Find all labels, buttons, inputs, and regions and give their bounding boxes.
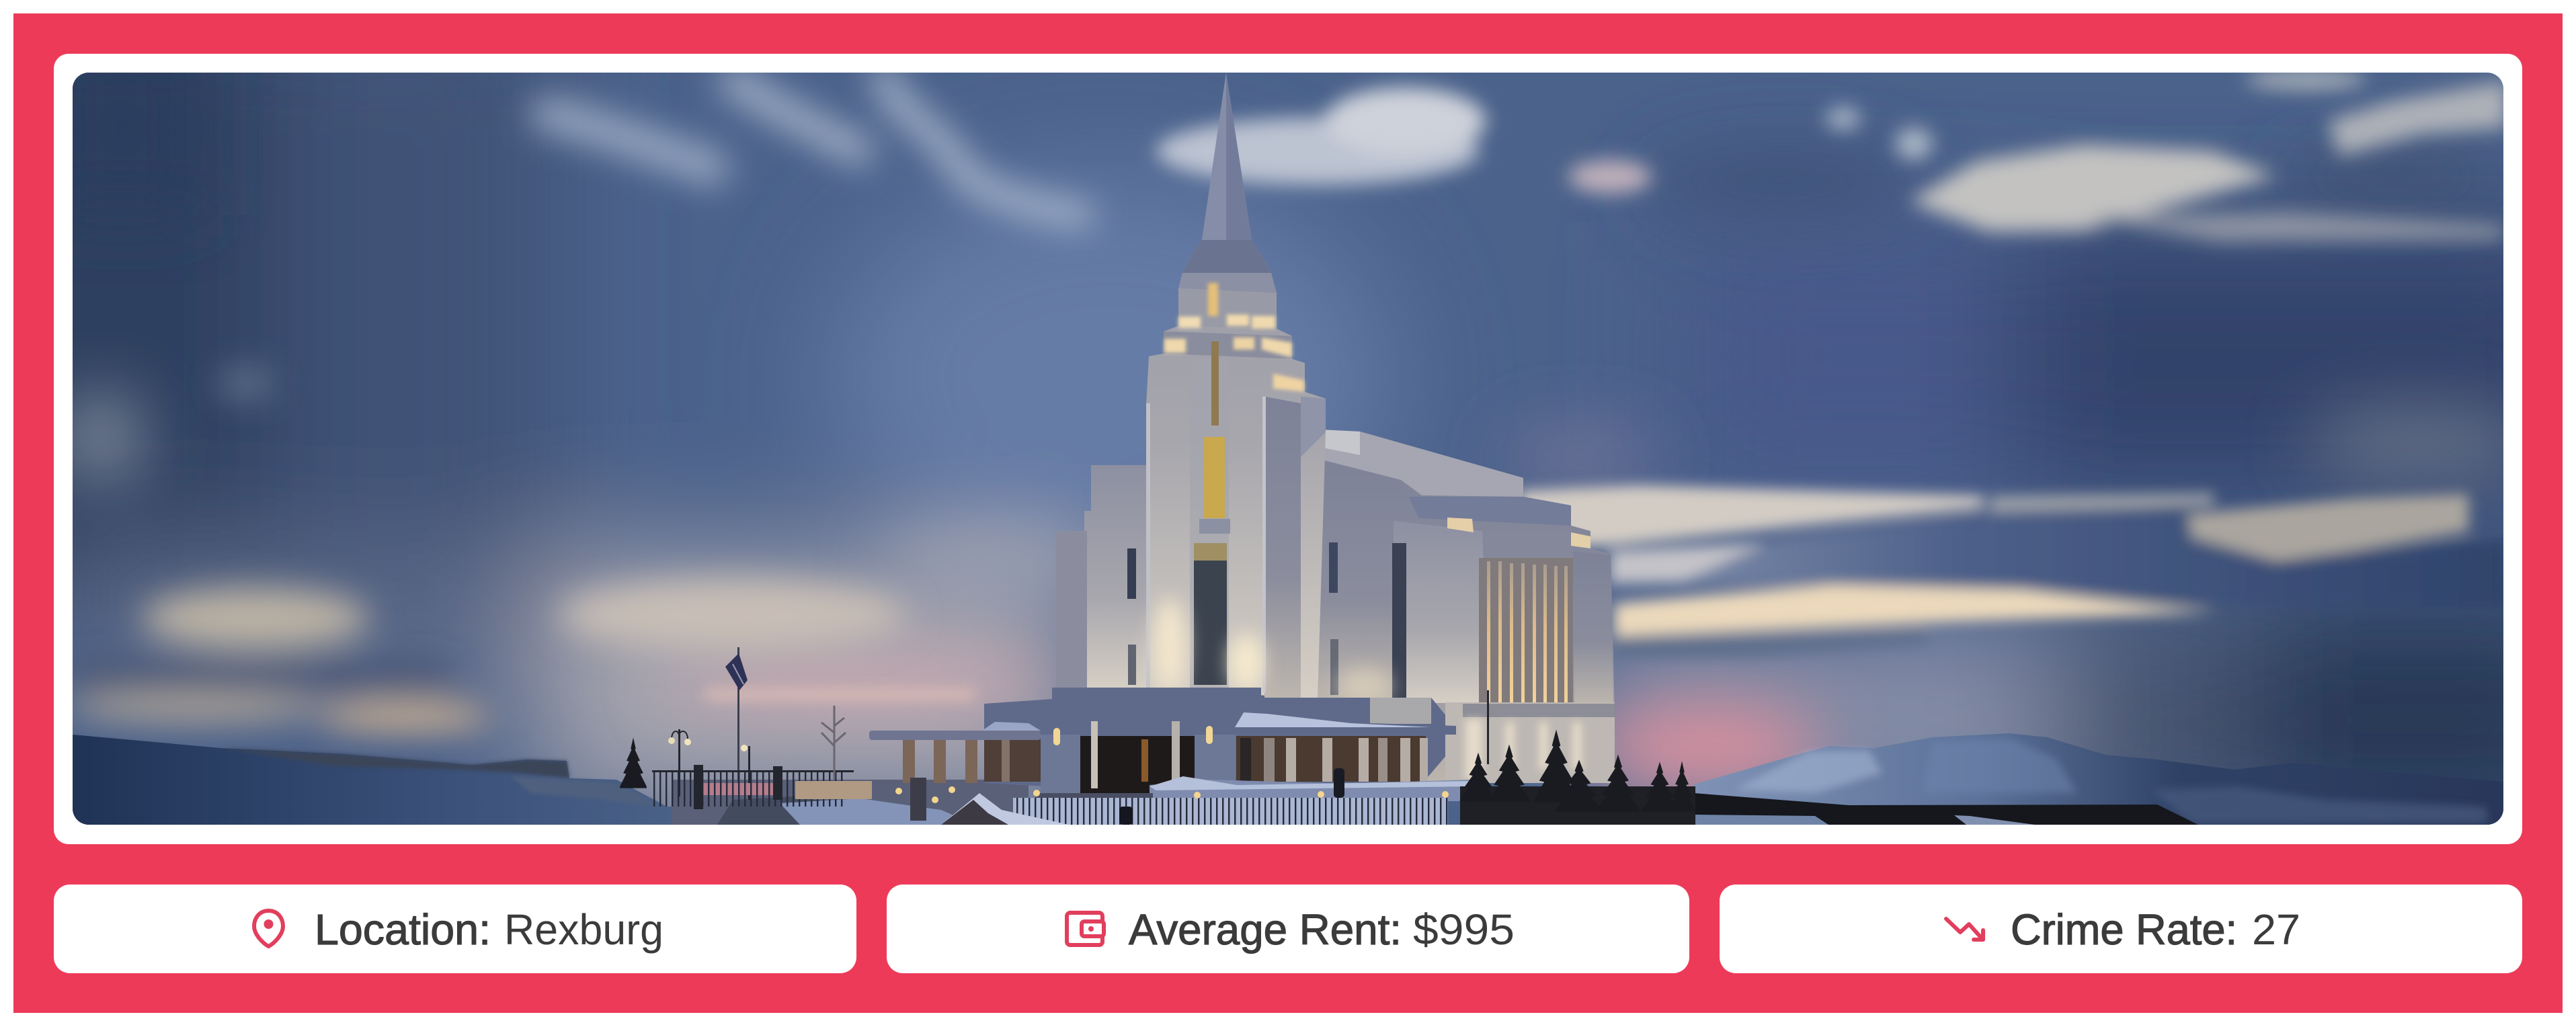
main entrance [1041, 735, 1080, 793]
evergreen trees right [1460, 690, 1695, 825]
flag and pole [725, 647, 748, 795]
icon: wallet [1067, 913, 1104, 945]
label: location: Location: [315, 905, 491, 954]
fins [1487, 561, 1490, 703]
tower lit setbacks [1164, 283, 1304, 392]
photo card [54, 54, 2522, 844]
label: average rent: Average Rent: [1129, 905, 1402, 954]
right porch [1236, 736, 1426, 782]
stat pill: average rent [887, 885, 1689, 973]
right nave [1277, 429, 1615, 783]
west block [1056, 465, 1146, 688]
photo: temple at dusk [73, 73, 2503, 825]
label: crime rate: Crime Rate: [2011, 905, 2237, 954]
temple [869, 73, 1615, 793]
windows [1204, 437, 1225, 518]
icon: map pin [254, 911, 283, 946]
value: average rent: $995 [1413, 905, 1515, 954]
ground and snow [672, 780, 1029, 825]
mountain [1694, 733, 2503, 825]
lamps, fence and small trees left [620, 706, 872, 809]
tower [1146, 73, 1326, 699]
base block [984, 688, 1463, 788]
snow hill left [73, 735, 672, 825]
left canopy [984, 739, 1041, 782]
clouds [548, 77, 1082, 215]
icon: trending down arrow [1946, 919, 1983, 940]
uplights [1154, 598, 1392, 703]
stat pill: crime rate [1720, 885, 2522, 973]
small ground lamps [895, 786, 1449, 803]
stat pill: location [54, 885, 856, 973]
value: crime rate: 27 [2252, 905, 2300, 954]
value: location: Rexburg [504, 905, 663, 954]
snow and fence foreground [895, 768, 1470, 825]
